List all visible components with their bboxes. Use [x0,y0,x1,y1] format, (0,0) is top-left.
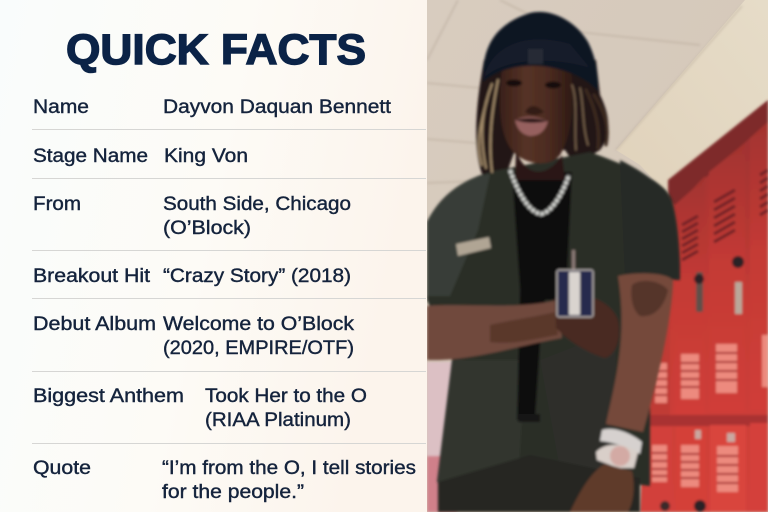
black t-shirt [512,172,572,420]
panel: photo of King Von in a school hallway [427,0,768,512]
trousers [438,455,640,512]
row: biggest anthem: (RIAA Platinum) [205,409,351,431]
row: debut album: Debut Album [33,313,156,335]
upper locker vents [682,170,768,260]
row: breakout hit [32,265,426,299]
shirt [427,152,680,492]
hair back [476,60,608,178]
row: debut album [32,313,426,372]
row: from: (O’Block) [163,217,251,239]
row: name: Dayvon Daquan Bennett [163,96,392,118]
row: name: Name [33,96,89,118]
name tag [456,237,491,256]
neck and face [500,62,573,163]
row: stage name: Stage Name [33,145,148,167]
row: from [32,193,426,251]
row: breakout hit: Breakout Hit [33,265,151,287]
row: biggest anthem: Took Her to the O [205,385,367,407]
row: biggest anthem: Biggest Anthem [33,385,184,407]
row: stage name: King Von [164,145,248,167]
hallway ceiling and wall [427,0,768,512]
title: QUICK FACTS [66,26,366,74]
ID badge [557,250,593,317]
row: quote: “I’m from the O, I tell stories [162,457,416,479]
row: quote: for the people.” [162,481,304,503]
row: debut album: (2020, EMPIRE/OTF) [163,337,354,359]
faded lockers at left [427,362,457,512]
row: breakout hit: “Crazy Story” (2018) [163,265,351,287]
left forearm [427,300,562,360]
row: name [32,96,426,130]
red lockers [640,100,768,512]
silver chain necklace [510,170,569,214]
lower hand [570,464,634,512]
row: from: From [33,193,81,215]
wrist jewellery and watch [596,429,642,468]
row: quote: Quote [33,457,91,479]
locs [479,80,607,172]
person [427,12,680,512]
right arm [606,273,673,432]
row: stage name [32,145,426,179]
facial features [506,80,561,136]
beanie [483,12,598,92]
panel: quick facts background [0,0,427,512]
hand on arm [555,295,619,358]
row: quote [33,457,416,503]
row: from: South Side, Chicago [163,193,351,215]
row: biggest anthem [32,385,426,444]
row: debut album: Welcome to O’Block [163,313,354,335]
